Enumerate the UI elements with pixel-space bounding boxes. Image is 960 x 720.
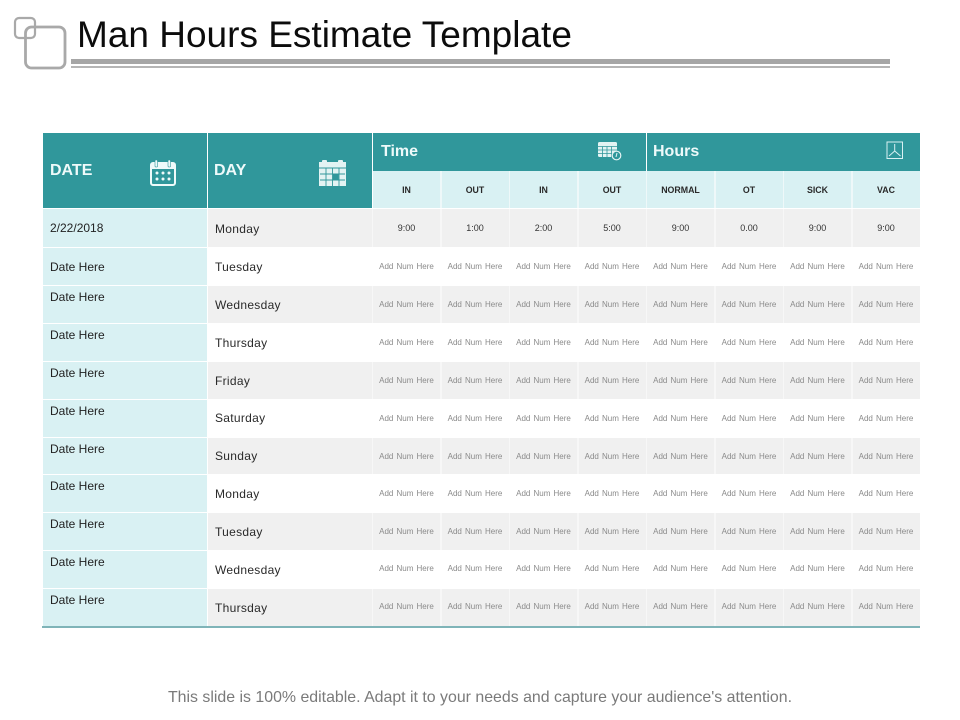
row 6: Add Num Here <box>379 414 434 423</box>
row 6: Add Num Here <box>516 414 571 423</box>
row 6: Add Num Here <box>585 414 639 423</box>
row 3: Add Num Here <box>653 300 708 309</box>
row 9: Add Num Here <box>516 527 571 536</box>
column labels: OT <box>743 185 755 195</box>
row 7 <box>43 438 920 474</box>
row 9: Add Num Here <box>448 527 502 536</box>
row 3: Add Num Here <box>448 300 502 309</box>
row 2: Add Num Here <box>516 262 571 271</box>
column labels: IN <box>402 185 411 195</box>
row 6: Add Num Here <box>859 414 913 423</box>
row 5: Add Num Here <box>516 376 571 385</box>
row 3: Add Num Here <box>722 300 776 309</box>
row 10: Add Num Here <box>516 564 571 573</box>
row 5 <box>43 362 920 399</box>
row 4: Add Num Here <box>448 338 502 347</box>
row 7: Add Num Here <box>722 452 776 461</box>
row 8 <box>43 475 913 512</box>
row 6: Saturday <box>215 411 265 425</box>
row 1: 9:00 <box>398 223 415 233</box>
row 2: Date Here <box>50 260 105 274</box>
row 4: Add Num Here <box>653 338 708 347</box>
row 2: Add Num Here <box>379 262 434 271</box>
row 7: Add Num Here <box>790 452 845 461</box>
row 5: Add Num Here <box>653 376 708 385</box>
row 9: Add Num Here <box>585 527 639 536</box>
row 10: Add Num Here <box>585 564 639 573</box>
icon: calendar with clock <box>598 142 622 160</box>
row 1: 9:00 <box>809 223 826 233</box>
row 7: Date Here <box>50 442 105 456</box>
row 2: Add Num Here <box>653 262 708 271</box>
header: date: DATE <box>50 162 92 179</box>
row 10: Add Num Here <box>379 564 434 573</box>
row 3 <box>43 286 920 323</box>
row 6: Add Num Here <box>448 414 502 423</box>
row 5: Add Num Here <box>379 376 434 385</box>
row 8: Add Num Here <box>516 489 571 498</box>
row 8: Add Num Here <box>722 489 776 498</box>
row 10: Add Num Here <box>790 564 845 573</box>
row 11 <box>43 589 920 626</box>
row 9: Date Here <box>50 517 105 531</box>
row 8: Monday <box>215 487 260 501</box>
row 7: Add Num Here <box>379 452 434 461</box>
row 2: Add Num Here <box>722 262 776 271</box>
footer caption: This slide is 100% editable. Adapt it to your needs and capture your audience's attention. <box>168 689 792 706</box>
row 11: Add Num Here <box>379 602 434 611</box>
column labels: SICK <box>807 185 828 195</box>
row 11: Add Num Here <box>859 602 913 611</box>
row 1: 9:00 <box>672 223 689 233</box>
row 11: Add Num Here <box>516 602 571 611</box>
row 3: Add Num Here <box>516 300 571 309</box>
row 9: Add Num Here <box>379 527 434 536</box>
row 7: Add Num Here <box>859 452 913 461</box>
row 10: Add Num Here <box>653 564 708 573</box>
row 10: Add Num Here <box>448 564 502 573</box>
row 8: Add Num Here <box>790 489 845 498</box>
row 7: Add Num Here <box>585 452 639 461</box>
row 1 <box>43 209 920 246</box>
row 7: Add Num Here <box>516 452 571 461</box>
title underline <box>71 59 890 68</box>
row 1: Monday <box>215 222 260 236</box>
row 3: Add Num Here <box>859 300 913 309</box>
row 11: Add Num Here <box>790 602 845 611</box>
row 11: Add Num Here <box>653 602 708 611</box>
row 5: Date Here <box>50 366 105 380</box>
header: day: DAY <box>214 162 246 179</box>
row 7: Add Num Here <box>653 452 708 461</box>
title: Man Hours Estimate Template <box>77 14 572 55</box>
row 5: Add Num Here <box>448 376 502 385</box>
row 1: 2/22/2018 <box>50 221 103 235</box>
row 9: Add Num Here <box>859 527 913 536</box>
row 2 <box>43 248 913 285</box>
row 4: Add Num Here <box>516 338 571 347</box>
row 6: Add Num Here <box>722 414 776 423</box>
row 3: Wednesday <box>215 298 281 312</box>
row 5: Add Num Here <box>722 376 776 385</box>
row 6: Add Num Here <box>790 414 845 423</box>
column labels: IN <box>539 185 548 195</box>
header: hours: Hours <box>653 143 699 160</box>
row 9: Add Num Here <box>653 527 708 536</box>
row 8: Add Num Here <box>653 489 708 498</box>
row 2: Add Num Here <box>448 262 502 271</box>
row 6 <box>43 400 913 437</box>
row 4: Add Num Here <box>585 338 639 347</box>
row 10: Add Num Here <box>722 564 776 573</box>
row 1: 2:00 <box>535 223 552 233</box>
row 4: Add Num Here <box>722 338 776 347</box>
header: date <box>43 133 206 208</box>
row 3: Add Num Here <box>585 300 639 309</box>
row 3: Add Num Here <box>790 300 845 309</box>
row 1: 9:00 <box>877 223 895 233</box>
row 5: Add Num Here <box>790 376 845 385</box>
header: time: Time <box>381 143 418 160</box>
header: day <box>208 133 372 208</box>
row 1: 1:00 <box>466 223 484 233</box>
row 9: Tuesday <box>215 525 263 539</box>
row 8: Add Num Here <box>379 489 434 498</box>
row 8: Add Num Here <box>585 489 639 498</box>
table bottom rule <box>42 626 920 628</box>
row 5: Add Num Here <box>859 376 913 385</box>
row 1: 0.00 <box>740 223 758 233</box>
column labels <box>373 171 920 208</box>
row 2: Add Num Here <box>585 262 639 271</box>
row 2: Add Num Here <box>859 262 913 271</box>
row 8: Date Here <box>50 479 105 493</box>
row 11: Add Num Here <box>585 602 639 611</box>
row 11: Add Num Here <box>722 602 776 611</box>
column labels: OUT <box>466 185 484 195</box>
row 11: Thursday <box>215 601 267 615</box>
row 11: Add Num Here <box>448 602 502 611</box>
row 10: Add Num Here <box>859 564 913 573</box>
column labels: VAC <box>877 185 895 195</box>
row 3: Date Here <box>50 290 105 304</box>
header: time <box>373 133 646 171</box>
row 9: Add Num Here <box>790 527 845 536</box>
row 4: Add Num Here <box>859 338 913 347</box>
header: hours <box>647 133 920 171</box>
row 1: 5:00 <box>603 223 621 233</box>
icon: date calendar <box>150 160 176 186</box>
row 8: Add Num Here <box>448 489 502 498</box>
row 5: Friday <box>215 374 250 388</box>
row 5: Add Num Here <box>585 376 639 385</box>
row 3: Add Num Here <box>379 300 434 309</box>
row 9 <box>43 513 920 550</box>
icon: overlapping rounded squares <box>14 16 66 70</box>
row 4: Date Here <box>50 328 105 342</box>
row 2: Add Num Here <box>790 262 845 271</box>
row 10: Wednesday <box>215 563 281 577</box>
row 2: Tuesday <box>215 260 263 274</box>
row 10 <box>43 551 913 588</box>
row 7: Add Num Here <box>448 452 502 461</box>
row 7: Sunday <box>215 449 258 463</box>
icon: hours clock square <box>886 142 903 159</box>
row 4: Add Num Here <box>379 338 434 347</box>
row 4: Thursday <box>215 336 267 350</box>
row 4 <box>43 324 913 361</box>
column labels: OUT <box>603 185 621 195</box>
icon: day calendar <box>319 160 346 186</box>
row 8: Add Num Here <box>859 489 913 498</box>
row 10: Date Here <box>50 555 105 569</box>
row 4: Add Num Here <box>790 338 845 347</box>
row 6: Add Num Here <box>653 414 708 423</box>
row 9: Add Num Here <box>722 527 776 536</box>
row 11: Date Here <box>50 593 105 607</box>
column labels: NORMAL <box>661 185 700 195</box>
row 6: Date Here <box>50 404 105 418</box>
